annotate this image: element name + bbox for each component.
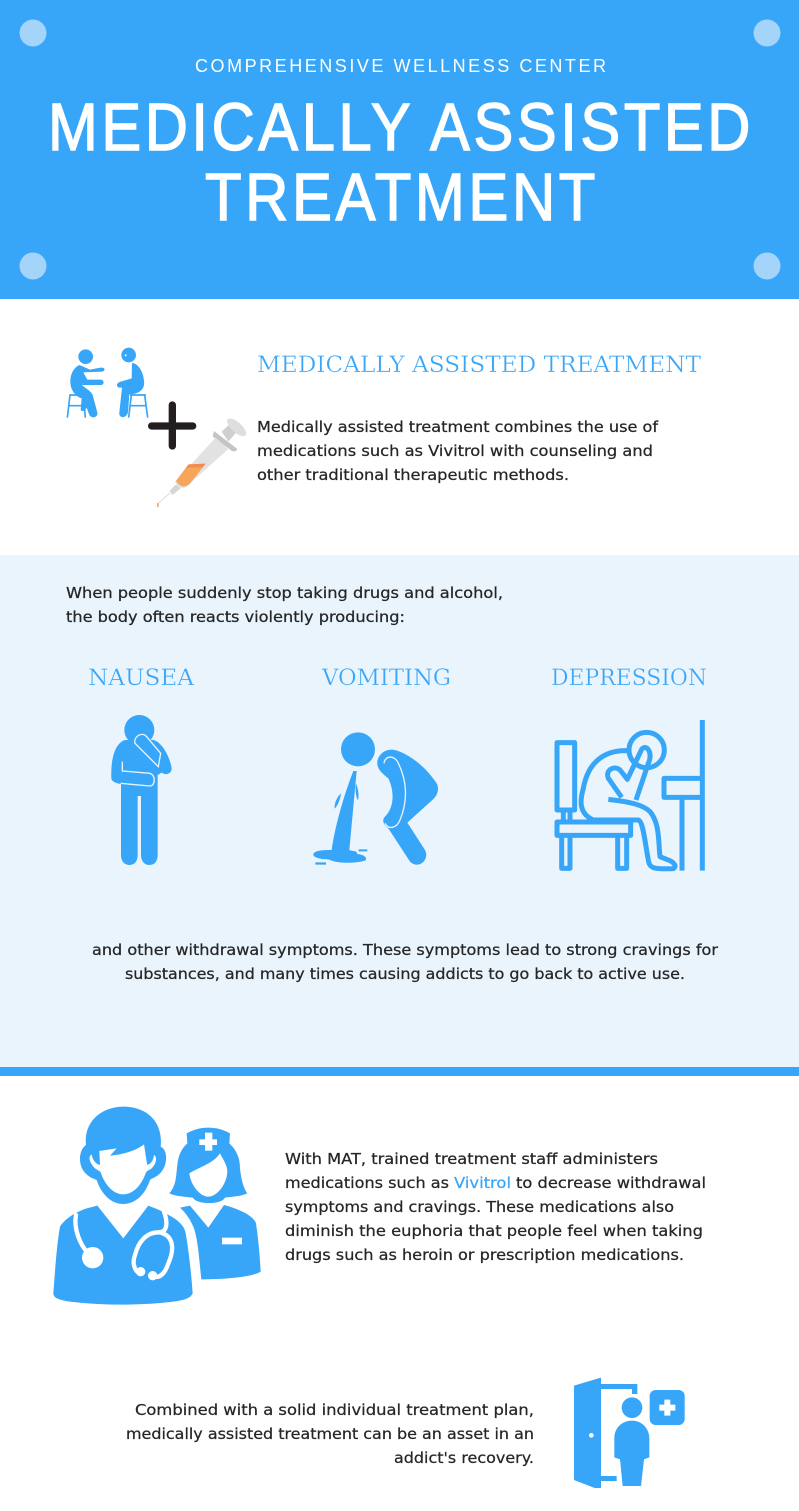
withdrawal closing text (92, 941, 719, 983)
withdrawal intro text: When people suddenly stop taking drugs and alcohol, (66, 584, 503, 602)
header banner (0, 0, 799, 299)
title: TREATMENT (205, 160, 599, 235)
treatment staff text: diminish the euphoria that people feel when taking (285, 1222, 703, 1240)
treatment staff text: symptoms and cravings. These medications also (285, 1198, 674, 1216)
panel: withdrawal symptoms background (0, 555, 799, 1076)
treatment staff text: Vivitrol (454, 1174, 511, 1192)
heading: vomiting: VOMITING (321, 665, 451, 691)
closing text: addict's recovery. (394, 1449, 534, 1467)
heading: nausea: NAUSEA (88, 665, 195, 691)
withdrawal intro text: the body often reacts violently producing: (66, 608, 405, 626)
icon: counseling plus syringe (67, 348, 249, 507)
nurse (169, 1128, 261, 1279)
icon: doctor and nurse (53, 1107, 261, 1305)
closing text: Combined with a solid individual treatment plan, (135, 1401, 534, 1419)
treatment staff text: medications such as (285, 1174, 449, 1192)
intro text: other traditional therapeutic methods. (257, 466, 569, 484)
closing text: medically assisted treatment can be an asset in an (126, 1425, 534, 1443)
treatment staff text: to decrease withdrawal (516, 1174, 706, 1192)
withdrawal intro text (66, 584, 503, 626)
icon: nausea (111, 715, 172, 865)
heading: depression: DEPRESSION (551, 665, 707, 691)
treatment staff text: drugs such as heroin or prescription medications. (285, 1246, 684, 1264)
treatment staff text (285, 1150, 706, 1264)
doctor (53, 1107, 193, 1305)
title (48, 90, 754, 235)
intro text (257, 418, 659, 484)
withdrawal closing text: substances, and many times causing addicts to go back to active use. (125, 965, 685, 983)
icon: depression (557, 720, 702, 871)
withdrawal closing text: and other withdrawal symptoms. These symptoms lead to strong cravings for (92, 941, 719, 959)
organization name: COMPREHENSIVE WELLNESS CENTER (195, 56, 606, 76)
closing text (126, 1401, 534, 1467)
intro text: Medically assisted treatment combines the use of (257, 418, 659, 436)
icon: vomiting (313, 732, 438, 865)
heading: medically assisted treatment: MEDICALLY ASSISTED TREATMENT (257, 352, 701, 378)
intro text: medications such as Vivitrol with counseling and (257, 442, 653, 460)
treatment staff text: With MAT, trained treatment staff administers (285, 1150, 658, 1168)
icon: person at clinic door (574, 1378, 685, 1488)
